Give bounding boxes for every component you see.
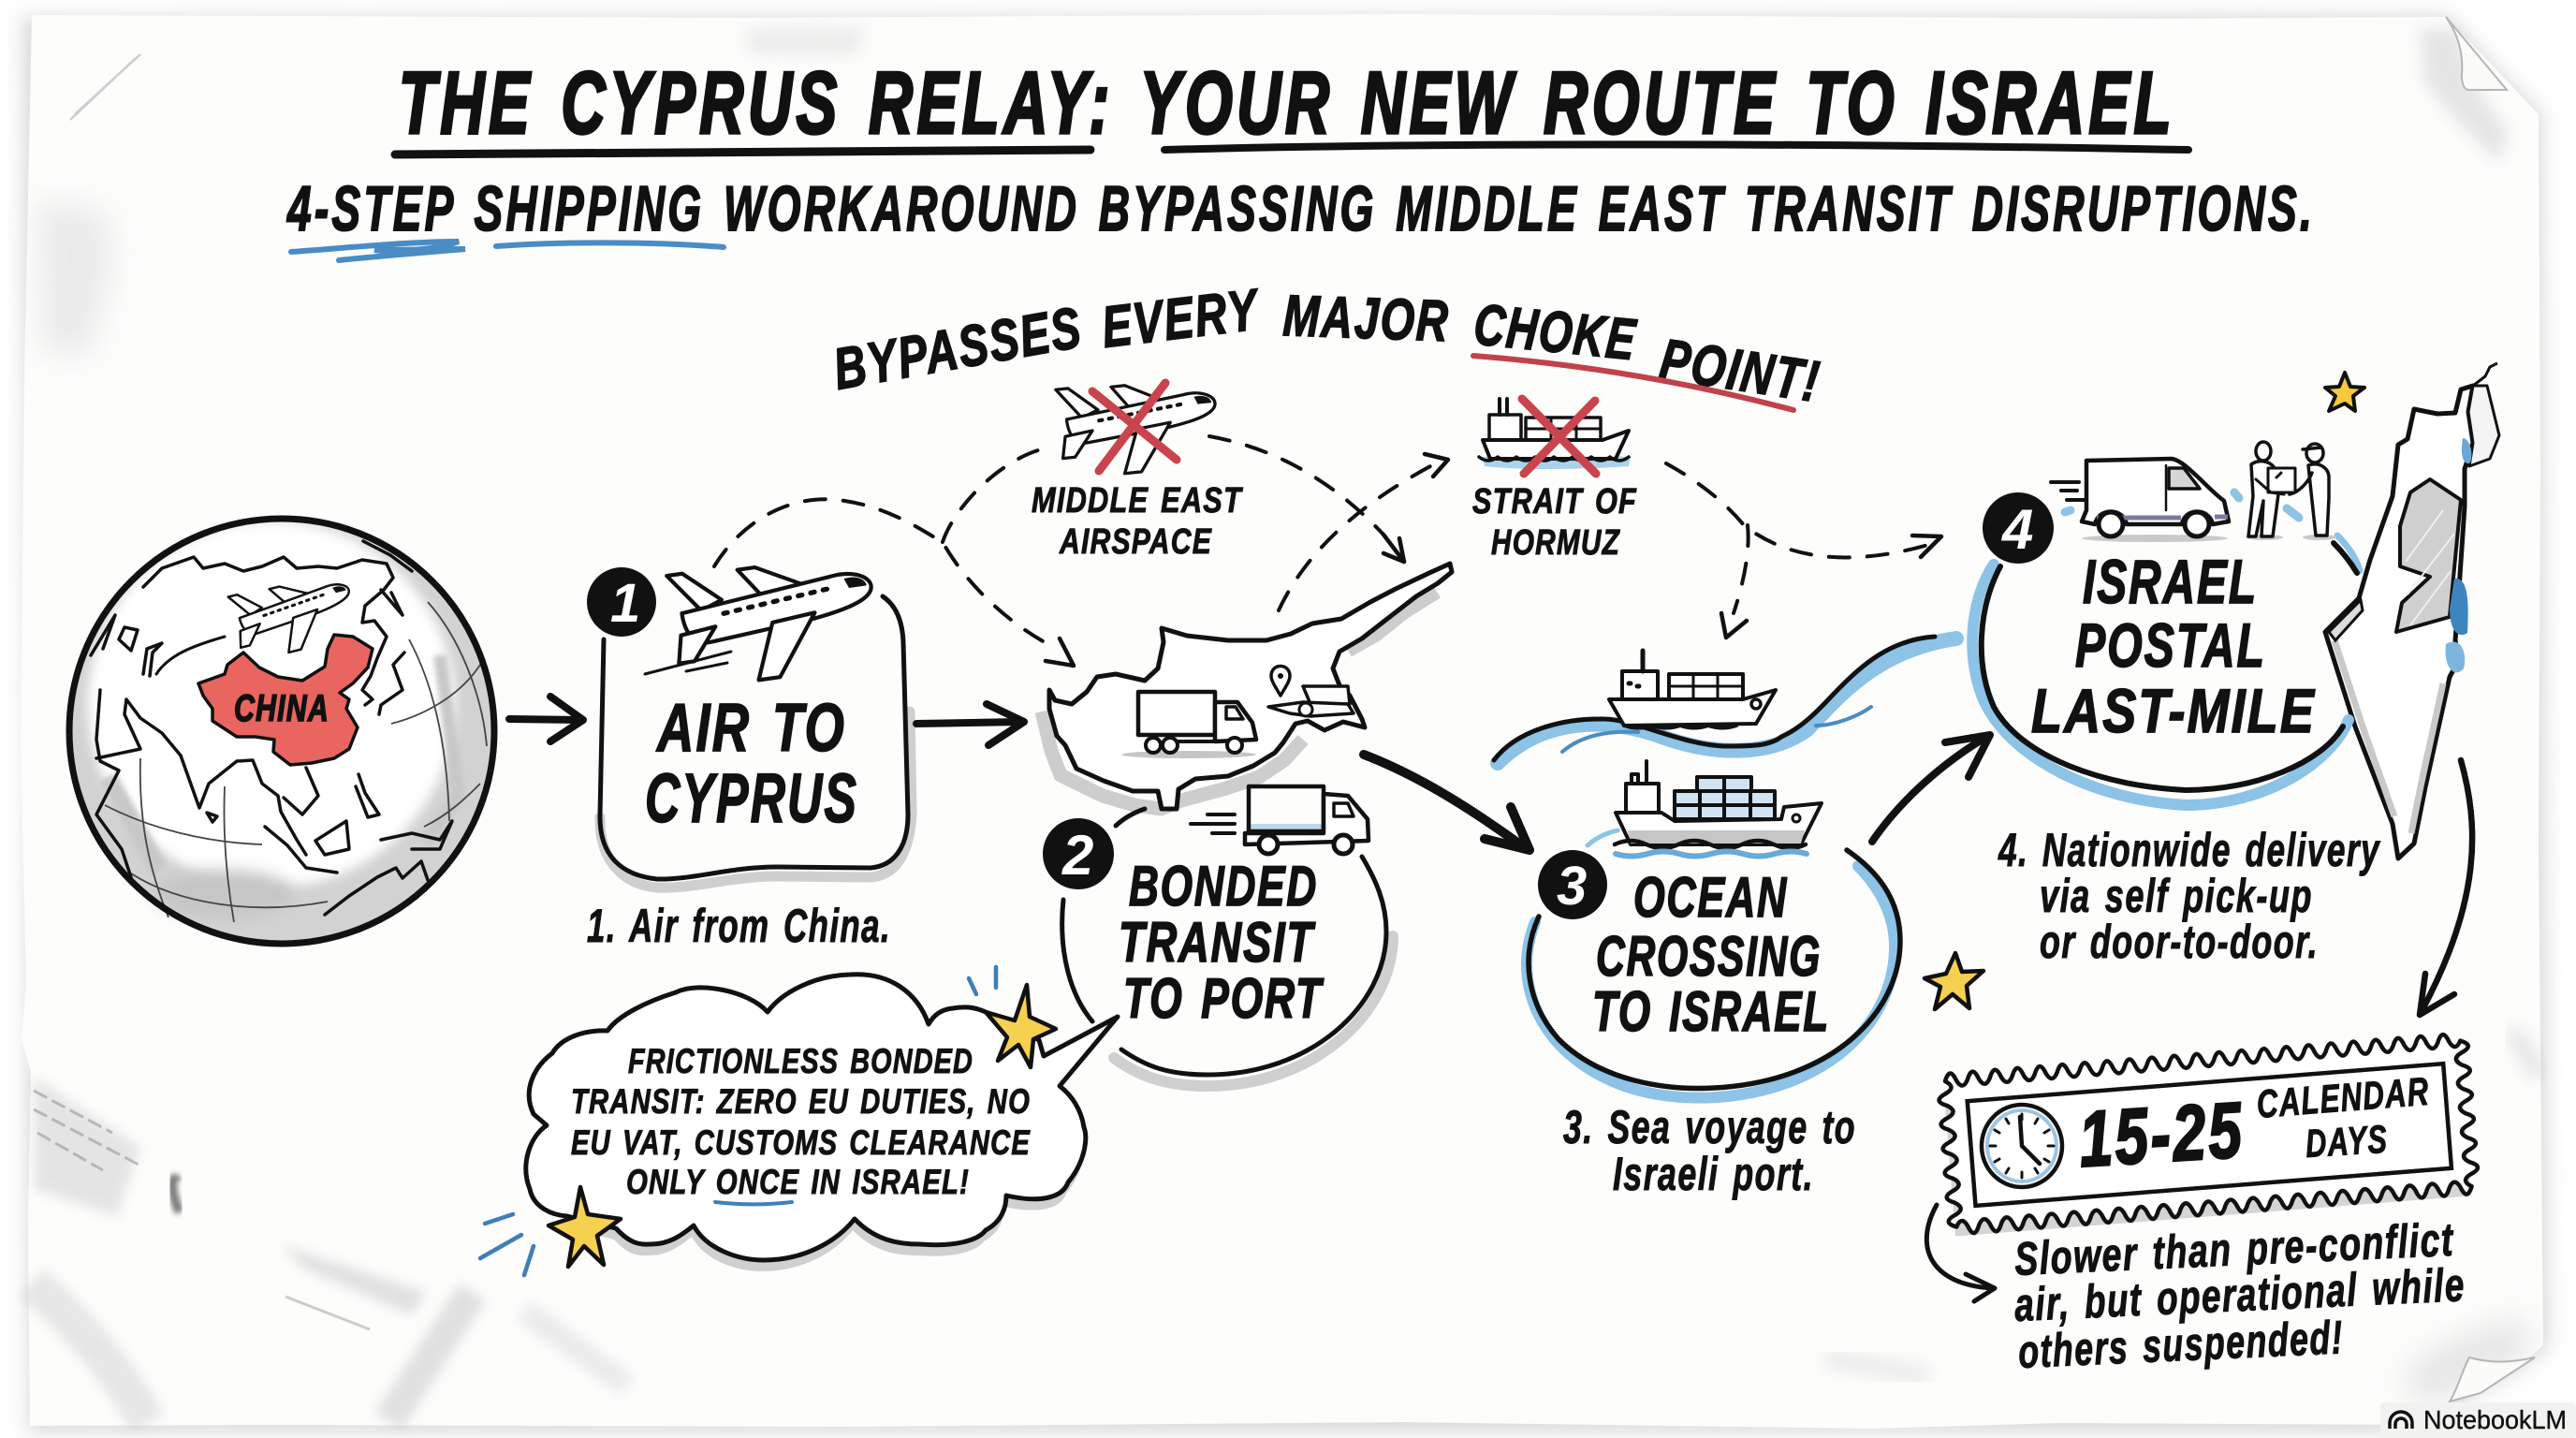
- panel: step 4 Israel postal last-mile: [1972, 442, 2360, 805]
- arrow: step 3 to step 4: [1872, 735, 1990, 842]
- blocked: middle east airspace: [1032, 374, 1243, 562]
- icon: yellow star: [1925, 953, 1983, 1009]
- stamp: 15-25 calendar days: 15-25: [2076, 1085, 2247, 1183]
- caption: step 4: or door-to-door.: [2040, 916, 2319, 968]
- step 4 badge: [1983, 492, 2054, 564]
- blocked: middle east airspace: AIRSPACE: [1059, 522, 1212, 562]
- icon: star top right: [986, 985, 1056, 1067]
- icon: delivery van: [2051, 459, 2229, 542]
- banner: bypasses every major choke point: POINT!: [1656, 328, 1824, 415]
- icon: parcel handover: [2246, 442, 2336, 540]
- icon: globe with China: [69, 519, 494, 944]
- icon: truck in Cyprus: [1138, 692, 1256, 753]
- banner: bypasses every major choke point: [828, 277, 1824, 415]
- arrow: stamp to note: [1926, 1205, 1995, 1301]
- step 3 heading: OCEAN: [1633, 866, 1788, 929]
- blue spark ticks: [480, 967, 996, 1275]
- step 1 badge: [587, 567, 656, 637]
- icon: waves under upper ship: [1494, 637, 1956, 763]
- step 3 badge: [1538, 850, 1607, 919]
- blue dabs: [2065, 492, 2299, 518]
- arrow: Cyprus to step 3: [1364, 755, 1530, 850]
- step 2 heading: BONDED: [1129, 855, 1318, 917]
- blocked: strait of Hormuz: HORMUZ: [1491, 523, 1620, 563]
- note: slower than pre-conflict: [2013, 1213, 2466, 1378]
- step 4 badge: 4: [2001, 498, 2033, 561]
- banner: bypasses every major choke point: EVERY: [1098, 277, 1265, 360]
- caption: step 4: 4. Nationwide delivery: [1998, 824, 2380, 876]
- watermark: NotebookLM: [2380, 1402, 2576, 1438]
- arrow: globe to step 1: [509, 697, 583, 741]
- step 1 heading: CYPRUS: [645, 759, 858, 837]
- stamp: 15-25 calendar days: DAYS: [2305, 1117, 2389, 1166]
- icon: star lower left: [549, 1187, 621, 1267]
- panel: step 2 bonded transit to port: [1043, 786, 1393, 1086]
- dashed route: via strait of Hormuz: [1279, 454, 1941, 638]
- step 4 heading: ISRAEL: [2083, 547, 2258, 616]
- step 2 badge: [1043, 818, 1114, 889]
- caption: step 1: 1. Air from China.: [587, 900, 891, 952]
- blocked: strait of Hormuz: [1472, 399, 1637, 563]
- step 2 badge: 2: [1061, 824, 1093, 887]
- icon: port vehicle: [1268, 686, 1354, 716]
- banner: bypasses every major choke point: CHOKE: [1471, 292, 1640, 373]
- map: Cyprus: [1042, 564, 1452, 809]
- globe grid lines: [105, 602, 487, 922]
- top-right curled corner: [2446, 17, 2507, 90]
- caption: step 3: Israeli port.: [1613, 1148, 1814, 1200]
- panel: step 3 ocean crossing: [1527, 850, 1900, 1098]
- step 2 heading: TRANSIT: [1119, 911, 1315, 974]
- bottom-right curled corner: [2450, 1357, 2535, 1401]
- arrow: Israel to delivery time stamp: [2420, 760, 2472, 1015]
- caption: step 3: [1563, 1101, 1856, 1200]
- blocked: middle east airspace: MIDDLE EAST: [1032, 481, 1243, 521]
- step 3 heading: CROSSING: [1596, 925, 1822, 988]
- step 1 badge: 1: [610, 573, 640, 634]
- stamp: 15-25 calendar days: [1937, 1033, 2480, 1237]
- stamp: 15-25 calendar days: CALENDAR: [2255, 1069, 2431, 1126]
- step 2 heading: TO PORT: [1123, 967, 1324, 1030]
- icon: upper cargo ship: [1609, 651, 1776, 728]
- icon: plane: [645, 548, 882, 691]
- note: slower than pre-conflict: others suspended!: [2017, 1311, 2345, 1378]
- banner: bypasses every major choke point: BYPASSES: [828, 295, 1087, 403]
- icon: delivery truck: [1191, 786, 1368, 854]
- callout: frictionless bonded transit: ONLY ONCE IN ISRAEL!: [626, 1163, 970, 1201]
- step 4 heading: [2031, 547, 2316, 745]
- icon: map pin: [1271, 667, 1290, 696]
- arrow: step 1 to Cyprus: [916, 704, 1024, 745]
- watermark: NotebookLM: NotebookLM: [2423, 1405, 2567, 1434]
- callout: frictionless bonded transit: [480, 967, 1118, 1275]
- step 3 badge: 3: [1557, 856, 1587, 917]
- dashed route: via middle east airspace: [714, 436, 1404, 666]
- callout: frictionless bonded transit: EU VAT, CUSTOMS CLEARANCE: [571, 1123, 1031, 1162]
- step 4 heading: POSTAL: [2075, 610, 2266, 680]
- step 1 heading: AIR TO: [655, 691, 846, 766]
- caption: step 4: via self pick-up: [2040, 870, 2313, 922]
- step 2 heading: [1119, 855, 1324, 1030]
- map: Israel: [2325, 363, 2499, 858]
- icon: globe with China: CHINA: [234, 688, 329, 729]
- icon: lower cargo ship: [1588, 761, 1822, 856]
- China highlighted: [198, 635, 373, 765]
- icon: small yellow star: [2325, 373, 2364, 411]
- step 4 heading: LAST-MILE: [2031, 676, 2316, 745]
- step 3 heading: TO ISRAEL: [1592, 980, 1830, 1043]
- blocked: strait of Hormuz: STRAIT OF: [1472, 482, 1637, 521]
- callout: frictionless bonded transit: TRANSIT: ZERO EU DUTIES, NO: [571, 1082, 1031, 1121]
- step 1 heading: [645, 691, 858, 837]
- step 3 heading: [1592, 866, 1830, 1043]
- caption: step 4: [1998, 824, 2380, 968]
- panel: step 1 air to Cyprus: [587, 548, 912, 888]
- banner: bypasses every major choke point: MAJOR: [1282, 284, 1451, 354]
- callout: frictionless bonded transit: FRICTIONLESS BONDED: [628, 1042, 973, 1080]
- icon: clock: [1982, 1105, 2062, 1187]
- caption: step 3: 3. Sea voyage to: [1563, 1101, 1856, 1153]
- continents: [91, 541, 452, 915]
